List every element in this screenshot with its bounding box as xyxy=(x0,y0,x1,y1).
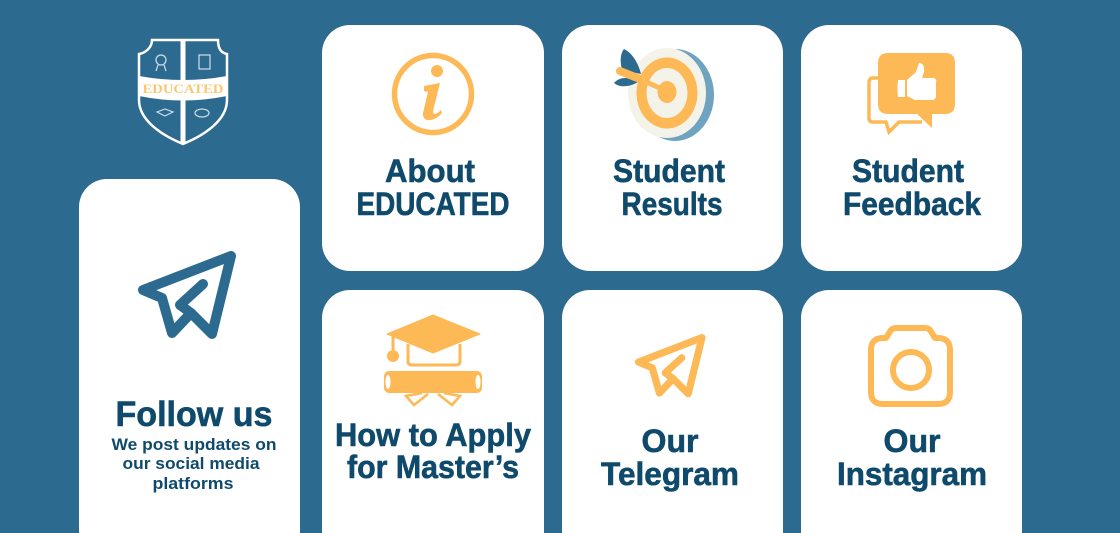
panel: about educated xyxy=(322,25,544,271)
heading: follow us: Follow us xyxy=(116,395,272,434)
heading: about educated: About xyxy=(385,153,475,189)
panel: follow us xyxy=(79,179,300,533)
heading: our telegram xyxy=(601,423,739,492)
text: follow us description: platforms xyxy=(152,474,234,493)
icon: target with dart xyxy=(614,48,714,141)
heading: how to apply xyxy=(335,417,531,485)
heading: student feedback xyxy=(843,153,981,222)
heading: student feedback: Feedback xyxy=(843,186,981,222)
panel: student feedback xyxy=(801,25,1022,271)
heading: student feedback: Student xyxy=(852,153,964,189)
text: follow us description: our social media xyxy=(122,454,260,473)
text: follow us description xyxy=(112,435,276,493)
heading: student results: Student xyxy=(613,153,725,189)
heading: our instagram xyxy=(837,423,987,492)
logo: shield: EDUCATED xyxy=(142,81,224,96)
panel: student results xyxy=(562,25,783,271)
icon: info xyxy=(394,56,472,132)
logo: shield xyxy=(139,40,227,144)
icon: camera xyxy=(871,328,950,404)
heading: about educated xyxy=(356,153,510,222)
icon: thumbs up speech bubbles xyxy=(869,53,955,132)
heading: student results: Results xyxy=(622,186,722,222)
heading: our telegram: Our xyxy=(642,423,698,459)
heading: our instagram: Our xyxy=(884,423,940,459)
heading: our telegram: Telegram xyxy=(601,456,739,492)
icon: graduation cap and diploma xyxy=(384,315,482,405)
panel: how to apply xyxy=(322,290,544,533)
heading: about educated: EDUCATED xyxy=(356,186,510,222)
heading: student results xyxy=(613,153,725,222)
heading: how to apply: How to Apply xyxy=(335,417,531,453)
panel: our instagram xyxy=(801,290,1022,533)
icon: paper plane orange xyxy=(639,338,702,394)
icon: paper plane blue xyxy=(143,256,231,334)
heading: our instagram: Instagram xyxy=(837,456,987,492)
panel: our telegram xyxy=(562,290,783,533)
heading: how to apply: for Master’s xyxy=(347,449,519,485)
text: follow us description: We post updates on xyxy=(112,435,276,454)
